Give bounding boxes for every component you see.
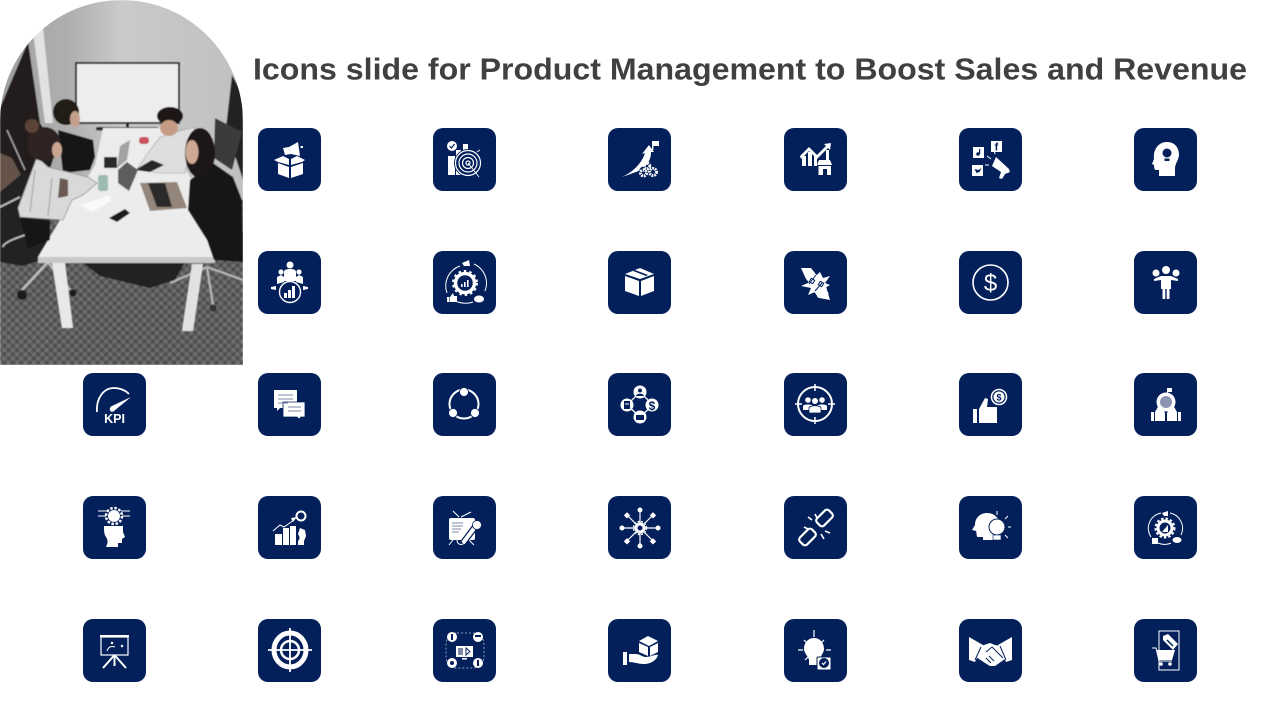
- icon: gear with trend inside circular cycle: [433, 251, 496, 314]
- icon: small gear in circular cycle: [1134, 496, 1197, 559]
- woman at right: [185, 128, 243, 260]
- icon: lightbulb with puzzle and check: [784, 619, 847, 682]
- icon: TV with microphone: [433, 496, 496, 559]
- shadows under table: [82, 262, 185, 288]
- icon: social media and megaphone: f: [995, 142, 999, 154]
- icon: chart trend with storefront: [784, 128, 847, 191]
- icon: phone with shopping cart and tag: [1134, 619, 1197, 682]
- icon: network of person, building, dollar, briefcase: $: [649, 399, 656, 413]
- icon: box with megaphone: [258, 128, 321, 191]
- icon: handshake: [959, 619, 1022, 682]
- icon: bar chart with target: [433, 128, 496, 191]
- brown cabinet on left: [0, 153, 22, 195]
- icon: presentation board with strategy: [83, 619, 146, 682]
- icon: head with gear and lightbulb: [83, 496, 146, 559]
- white pillar: [33, 27, 53, 123]
- woman at left: [18, 119, 97, 248]
- icon: team in target: [784, 373, 847, 436]
- icon: head with lightbulb: [959, 496, 1022, 559]
- icon: thumbs up with dollar coin: [959, 373, 1022, 436]
- icon: KPI gauge: KPI: [104, 412, 125, 426]
- icon: broken price tag with burst: [784, 251, 847, 314]
- icon: video monitor with social media badges: [433, 619, 496, 682]
- dark wall on right: [226, 75, 243, 180]
- icon: KPI gauge: [83, 373, 146, 436]
- left chair: [0, 130, 76, 300]
- wall monitor: [75, 62, 180, 130]
- icon grid: [83, 128, 1197, 682]
- icon: people with bar chart in circle: [258, 251, 321, 314]
- icon: social media and megaphone: [959, 128, 1022, 191]
- icon: hand holding box: [608, 619, 671, 682]
- laptops: [104, 140, 187, 211]
- icon: dollar in circle: $: [984, 270, 997, 297]
- icon: broken chain link: [784, 496, 847, 559]
- icon: dollar in circle: [959, 251, 1022, 314]
- icon: thumbs up with dollar coin: $: [996, 392, 1002, 402]
- title: Icons slide for Product Management to Boost Sales and Revenue: [253, 52, 1247, 86]
- icon: chat bubbles: [258, 373, 321, 436]
- icon: crosshair target: [258, 619, 321, 682]
- items on table: [58, 137, 149, 222]
- photo: team meeting around a table in an arch frame: [0, 0, 243, 365]
- icon: hub with eight spokes: [608, 496, 671, 559]
- icon: person balancing coins: [1134, 251, 1197, 314]
- carpet floor: [0, 200, 243, 365]
- icon: growth bars, chess knight and target: [258, 496, 321, 559]
- icon: rising arrow with flag and gears: [608, 128, 671, 191]
- icon: three-node cycle: [433, 373, 496, 436]
- icon: network of person, building, dollar, briefcase: [608, 373, 671, 436]
- icon: package box: [608, 251, 671, 314]
- man at right: [138, 107, 195, 173]
- dark window on left: [0, 43, 54, 180]
- icon: head with lightbulb: [1134, 128, 1197, 191]
- man at back left: [53, 99, 95, 173]
- icon: hands holding globe gear and flag: [1134, 373, 1197, 436]
- right chair: [170, 118, 243, 312]
- table: [38, 128, 215, 331]
